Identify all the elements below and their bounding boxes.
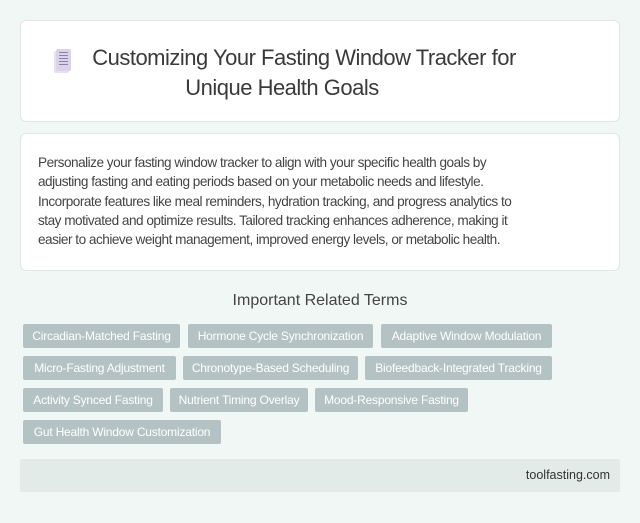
footer	[20, 459, 620, 492]
title	[92, 45, 516, 100]
tags: Nutrient Timing Overlay	[179, 393, 299, 407]
tags: Mood-Responsive Fasting	[324, 393, 459, 407]
section heading: Important Related Terms	[233, 292, 407, 309]
title: Unique Health Goals	[185, 75, 379, 100]
description card	[20, 133, 620, 271]
description text: easier to achieve weight management, improved energy levels, or metabolic health.	[38, 232, 500, 247]
tags	[23, 324, 552, 444]
tags: Micro-Fasting Adjustment	[34, 361, 165, 375]
footer text: toolfasting.com	[526, 468, 610, 482]
tags: Circadian-Matched Fasting	[32, 329, 171, 343]
title: Customizing Your Fasting Window Tracker for	[92, 45, 516, 70]
description text: adjusting fasting and eating periods based on your metabolic needs and lifestyle.	[38, 174, 483, 189]
tags: Activity Synced Fasting	[33, 393, 153, 407]
description text: stay motivated and optimize results. Tailored tracking enhances adherence, making it	[38, 213, 507, 228]
tags: Hormone Cycle Synchronization	[198, 329, 363, 343]
description text: Personalize your fasting window tracker to align with your specific health goals by	[38, 155, 486, 170]
tags: Gut Health Window Customization	[34, 425, 210, 439]
icon: document	[56, 49, 71, 71]
description text: Incorporate features like meal reminders, hydration tracking, and progress analytics to	[38, 194, 511, 209]
tags: Biofeedback-Integrated Tracking	[375, 361, 542, 375]
description text	[38, 155, 512, 247]
tags: Chronotype-Based Scheduling	[192, 361, 349, 375]
header card	[20, 20, 620, 122]
tags: Adaptive Window Modulation	[392, 329, 541, 343]
